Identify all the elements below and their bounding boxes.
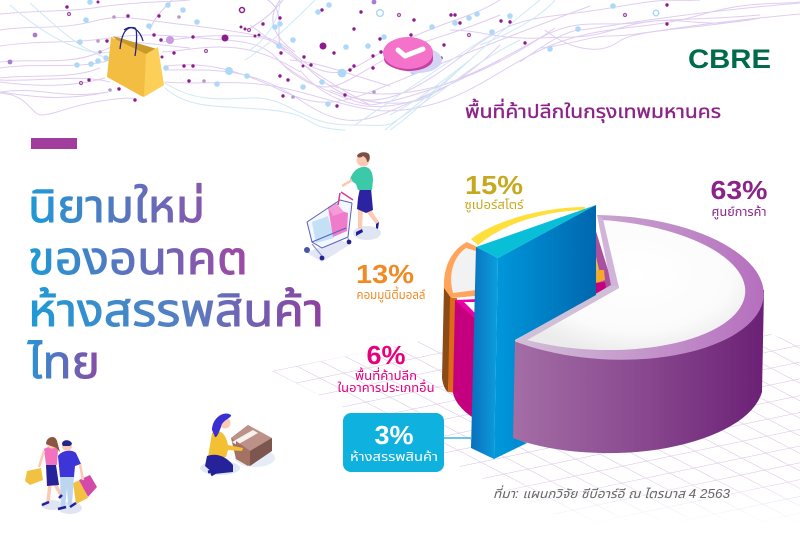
slice: 63% shopping centres [512,215,764,453]
callout: 15%: ซูเปอร์สโตร์ [464,198,524,212]
floor grid [272,330,800,533]
callout: 15% [464,170,524,212]
network dots [8,0,669,108]
callout: 13%: คอมมูนิตี้มอลล์ [356,286,426,302]
source note: ที่มา: แผนกวิจัย ซีบีอาร์อี ณ ไตรมาส 4 2563 [493,485,730,501]
callout: 13% [356,259,426,302]
chart heading: พื้นที่ค้าปลีกในกรุงเทพมหานคร [465,98,721,123]
logo: CBRE: CBRE [688,44,771,74]
slice: 15% superstores [471,207,590,245]
slice: 3% department stores [471,205,596,459]
illustration: woman with parcel [200,413,275,475]
icon: pink check button [383,37,442,73]
network lines background [0,0,800,130]
illustration: couple with shopping bags [25,437,97,514]
title: ของอนาคต [28,232,248,284]
callout: 63%: 63% [710,175,768,205]
slice: 6% other buildings [453,299,480,420]
callout: 6%: พื้นที่ค้าปลีก [355,367,417,383]
slice: 13% community malls [442,242,477,393]
icon: shopping bag [107,28,164,97]
callout: 63% [710,175,768,219]
pie chart [442,205,764,459]
callout: 6%: 6% [366,340,406,370]
title: นิยามใหม่ [28,180,205,232]
title [27,180,324,388]
callout: 3%: 3% [374,420,414,450]
callout: 13%: 13% [356,259,414,289]
connector line [443,437,472,439]
illustration: woman with shopping cart [304,152,381,262]
shopper [358,210,363,229]
cart [304,192,353,262]
notch interior [594,225,613,298]
title: ห้างสรรพสินค้า [28,284,324,336]
callout: 63%: ศูนย์การค้า [712,205,766,219]
callout: 3% [343,413,444,472]
callout: 6% [338,340,434,395]
callout: 3%: ห้างสรรพสินค้า [350,450,438,464]
title: ไทย [27,336,100,388]
callout: 6%: ในอาคารประเภทอื่น [338,379,434,395]
callout: 15%: 15% [465,170,523,200]
accent bar [31,138,77,149]
